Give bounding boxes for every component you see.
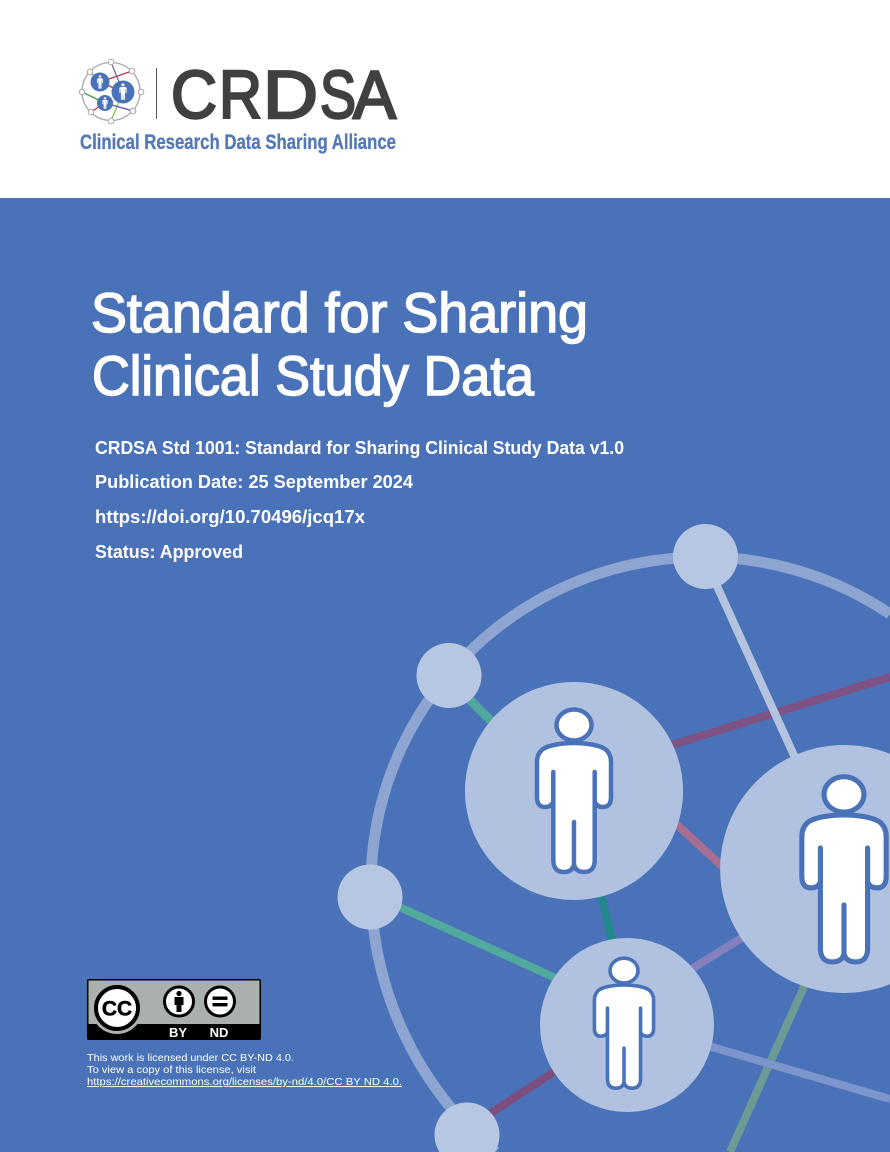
CC BY-ND badge: ND: [210, 1025, 228, 1040]
perimeter nodes: [338, 524, 738, 1152]
document metadata: Publication Date: 25 September 2024: [95, 472, 413, 492]
icon: network of people: [79, 59, 144, 124]
header background: [0, 0, 890, 198]
logo tagline: Clinical Research Data Sharing Alliance: [80, 131, 396, 154]
person circle: left: [465, 682, 683, 900]
license text: https://creativecommons.org/licenses/by-nd/4.0/CC BY ND 4.0.: [87, 1076, 402, 1088]
icon: CC: CC: [102, 998, 132, 1020]
license text: This work is licensed under CC BY-ND 4.0.: [87, 1052, 294, 1064]
logo divider: [156, 68, 157, 119]
logo wordmark: R: [219, 57, 262, 133]
document metadata: Status: Approved: [95, 542, 243, 562]
person circle: bottom: [540, 938, 714, 1112]
network illustration: [338, 524, 890, 1152]
document metadata: https://doi.org/10.70496/jcq17x: [95, 507, 365, 527]
document metadata: [95, 438, 624, 562]
title: Clinical Study Data: [92, 344, 535, 407]
logo wordmark: S: [320, 57, 356, 133]
license text: To view a copy of this license, visit: [87, 1064, 256, 1076]
connector lines: [395, 575, 890, 1152]
document metadata: CRDSA Std 1001: Standard for Sharing Clinical Study Data v1.0: [95, 438, 624, 458]
person circle: right: [720, 745, 890, 993]
badge labels: BY: [169, 1025, 187, 1040]
title: [91, 281, 588, 407]
logo wordmark: [171, 57, 397, 133]
outer ring: [371, 557, 890, 1152]
logo wordmark: A: [353, 57, 397, 133]
icon: BY: [164, 987, 194, 1016]
title: Standard for Sharing: [91, 281, 588, 344]
logo wordmark: D: [263, 57, 318, 133]
CC BY-ND badge: [87, 979, 261, 1040]
CRDSA logo: [79, 57, 397, 154]
icon: ND: [206, 987, 234, 1016]
icon: CC: [96, 987, 138, 1034]
logo wordmark: C: [171, 57, 217, 133]
license text: [87, 1052, 402, 1088]
